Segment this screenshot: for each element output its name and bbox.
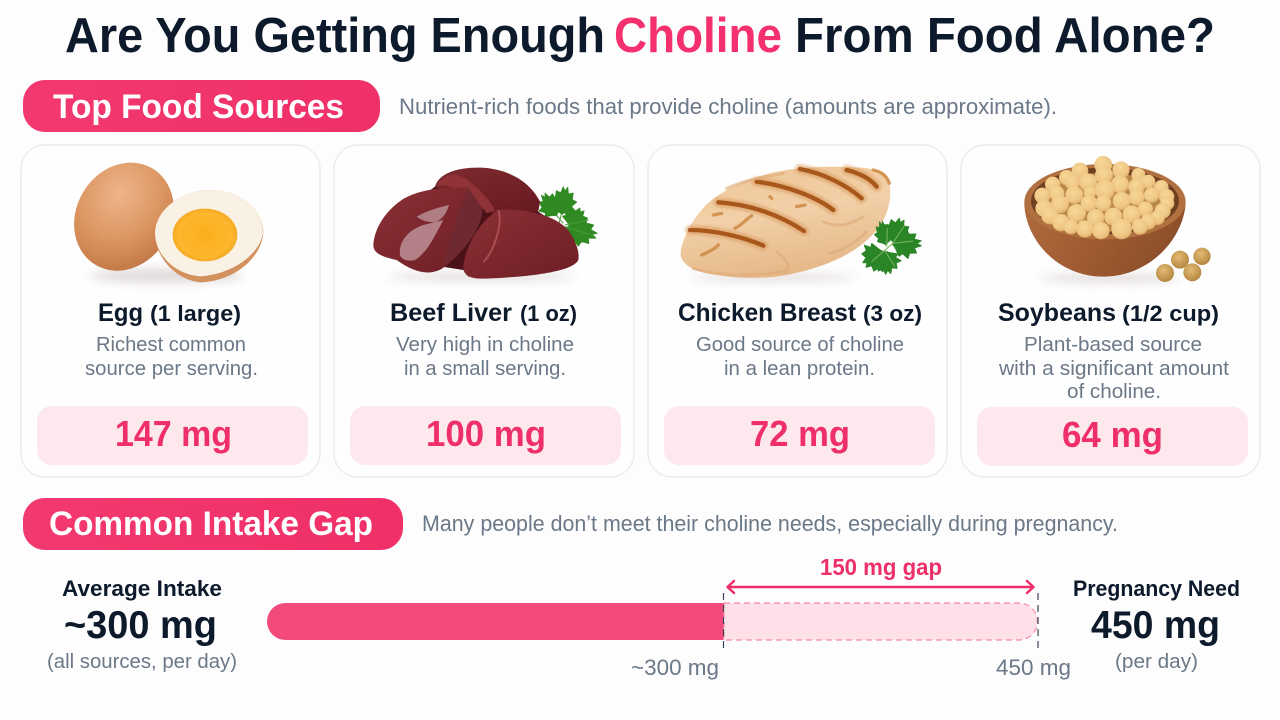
icon: egg illustration xyxy=(55,144,263,289)
food name: Chicken Breast xyxy=(678,299,857,327)
choline amount: 64 mg xyxy=(1062,414,1163,455)
pregnancy need stat: (per day) xyxy=(1115,650,1198,673)
section heading: top food sources: Top Food Sources xyxy=(53,88,344,126)
food name: Beef Liver xyxy=(390,299,512,327)
section heading: top food sources xyxy=(23,80,380,132)
gap label: 150 mg gap xyxy=(820,554,942,580)
food name: (3 oz) xyxy=(863,301,922,326)
description xyxy=(998,333,1229,403)
section description: food sources: Nutrient-rich foods that provide choline (amounts are approximate). xyxy=(399,94,1057,119)
food name xyxy=(998,299,1219,327)
icon: bowl of soybeans illustration xyxy=(1024,156,1211,282)
average intake stat: ~300 mg xyxy=(64,604,217,647)
description: Richest common xyxy=(96,333,246,356)
description xyxy=(696,333,904,380)
bar: gap to pregnancy need xyxy=(724,603,1038,640)
description: Very high in choline xyxy=(396,333,574,356)
description: of choline. xyxy=(1067,380,1161,403)
intake gap bar chart xyxy=(267,554,1071,680)
average intake stat xyxy=(47,576,237,673)
food name xyxy=(98,299,241,327)
choline amount xyxy=(37,406,308,465)
description: in a small serving. xyxy=(404,357,566,380)
food name: Egg xyxy=(98,299,143,327)
panel: egg xyxy=(21,144,320,477)
description: Plant-based source xyxy=(1024,333,1202,356)
arrow: gap span xyxy=(728,581,1034,593)
food name xyxy=(390,299,577,327)
food name: Soybeans xyxy=(998,299,1116,327)
axis label: 450 mg: 450 mg xyxy=(996,655,1071,680)
axis label: 300 mg: ~300 mg xyxy=(631,655,719,680)
section heading: common intake gap xyxy=(23,498,403,550)
choline amount: 72 mg xyxy=(750,413,850,454)
choline amount: 100 mg xyxy=(426,413,546,454)
description: with a significant amount xyxy=(998,357,1229,380)
average intake stat: (all sources, per day) xyxy=(47,650,237,673)
description: Good source of choline xyxy=(696,333,904,356)
title: Are You Getting Enough xyxy=(65,9,605,63)
food name: (1 oz) xyxy=(520,301,577,326)
choline amount xyxy=(350,406,621,465)
pregnancy need stat: 450 mg xyxy=(1091,604,1220,647)
title xyxy=(65,9,1215,63)
average intake stat: Average Intake xyxy=(62,576,222,601)
icon: beef liver illustration xyxy=(373,168,600,281)
choline amount xyxy=(977,407,1248,466)
marker lines xyxy=(724,593,1038,652)
title: Choline xyxy=(614,9,782,63)
section description: intake gap: Many people don’t meet their choline needs, especially during pregnancy. xyxy=(422,511,1118,536)
panel: soybeans xyxy=(961,145,1260,477)
pregnancy need stat: Pregnancy Need xyxy=(1073,576,1240,601)
description: in a lean protein. xyxy=(724,357,875,380)
description xyxy=(396,333,574,380)
food name: (1 large) xyxy=(150,301,241,326)
choline amount: 147 mg xyxy=(115,413,232,454)
icon: chicken breast illustration xyxy=(681,167,922,281)
choline amount xyxy=(664,406,935,465)
food name: (1/2 cup) xyxy=(1122,301,1219,326)
panel: beef liver xyxy=(334,145,634,477)
pregnancy need stat xyxy=(1073,576,1240,673)
title: From Food Alone? xyxy=(795,9,1215,63)
panel: chicken breast xyxy=(648,145,947,477)
section heading: common intake gap: Common Intake Gap xyxy=(49,505,373,543)
bar: average intake xyxy=(267,603,724,640)
description: source per serving. xyxy=(85,357,258,380)
description xyxy=(85,333,258,380)
